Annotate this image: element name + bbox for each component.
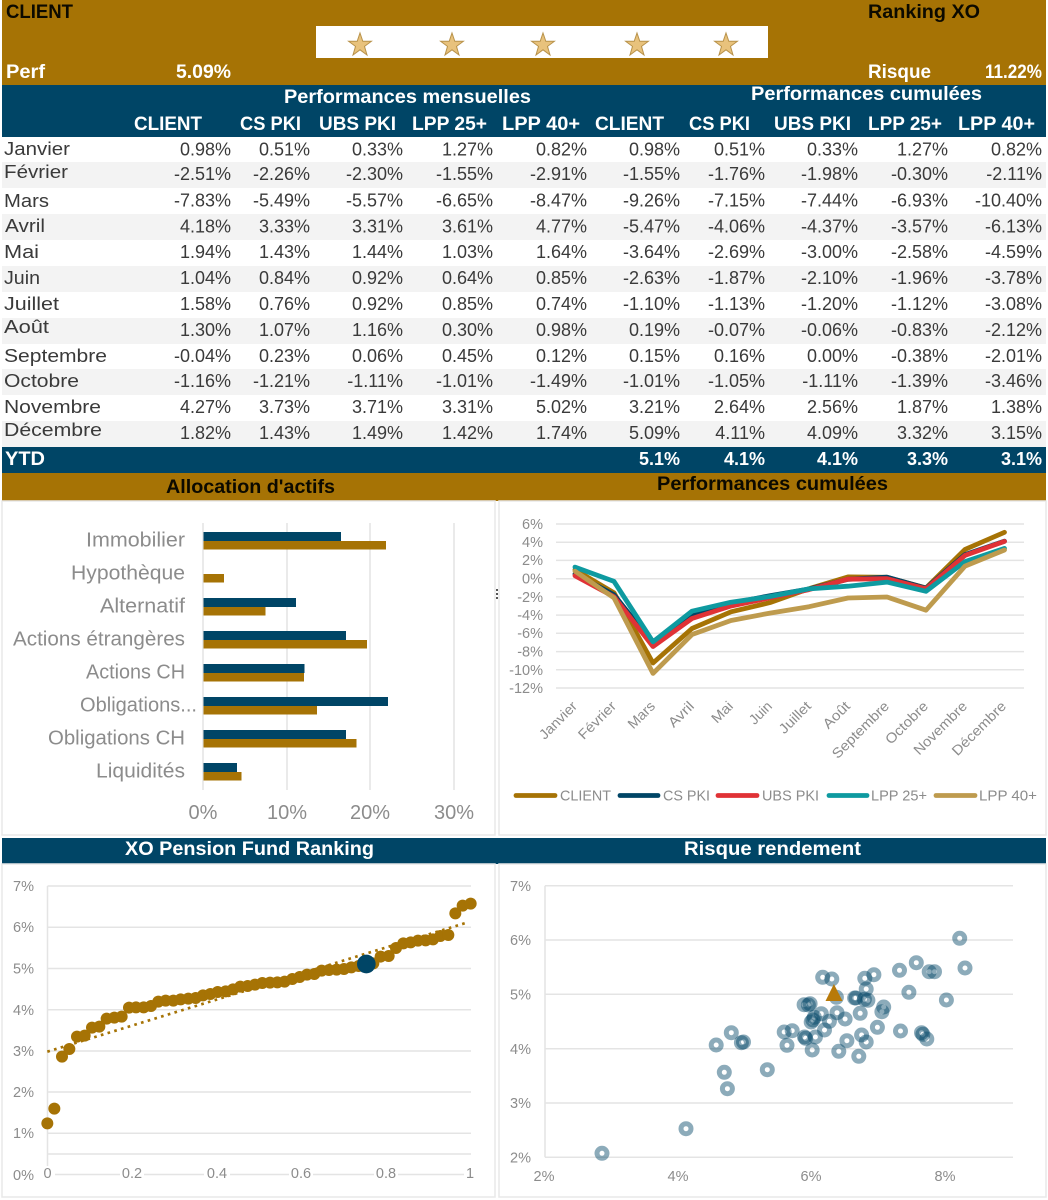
header band: CLIENT [6, 2, 73, 23]
panel: pension fund ranking chart: 6% [13, 920, 34, 936]
panel: cumulative performance line chart: Mai [708, 698, 736, 726]
panel: cumulative performance line chart: Juillet [775, 698, 814, 737]
table header: LPP 25+ [412, 114, 487, 135]
row: Juin: 0.84% [259, 268, 310, 288]
ranking stars [316, 26, 768, 58]
row: Janvier: 0.51% [714, 140, 765, 160]
row: Janvier: 0.51% [259, 140, 310, 160]
row: Mars [4, 190, 1042, 211]
row: Avril: 3.33% [259, 216, 310, 236]
row: Juin: -3.78% [985, 268, 1042, 288]
panel: asset allocation bar chart: 0% [189, 802, 218, 824]
section headings gold band: Performances cumulées [657, 474, 888, 495]
table header: CS PKI [689, 114, 750, 135]
table header: CLIENT [595, 114, 664, 135]
row: Mars: -8.47% [530, 190, 587, 210]
table header [2, 84, 1046, 137]
panel: risk return scatter chart: 5% [510, 988, 531, 1004]
row: Mars: -7.83% [174, 190, 231, 210]
row: Décembre: 3.32% [897, 423, 948, 443]
panel: cumulative performance line chart: Décembre [948, 698, 1009, 759]
row: Avril: 3.61% [442, 216, 493, 236]
row: Mars: -7.44% [801, 190, 858, 210]
row: Septembre: 0.45% [442, 346, 493, 366]
panel: pension fund ranking chart: 0 [43, 1166, 52, 1182]
table header: LPP 40+ [958, 114, 1035, 135]
row: Décembre: Décembre [4, 419, 102, 440]
row: Avril: -6.13% [985, 216, 1042, 236]
row: Janvier: 0.33% [352, 140, 403, 160]
panel: pension fund ranking chart: 3% [13, 1044, 34, 1060]
row: Mars: -6.65% [436, 190, 493, 210]
panel: cumulative performance line chart: -12% [509, 681, 543, 697]
row: Avril: 3.31% [352, 216, 403, 236]
row: Juillet: -1.12% [891, 294, 948, 314]
panel: cumulative performance line chart: 6% [522, 517, 543, 533]
panel: risk return scatter chart: 7% [510, 879, 531, 895]
row: Octobre: -1.01% [436, 371, 493, 391]
section headings blue band [2, 838, 1046, 864]
panel: cumulative performance line chart [499, 501, 1046, 835]
row: Octobre: -1.49% [530, 371, 587, 391]
row: Juin: -1.87% [708, 268, 765, 288]
panel: cumulative performance line chart: 0% [522, 572, 543, 588]
panel: asset allocation bar chart: Immobilier [86, 530, 185, 552]
row: Août: 0.30% [442, 320, 493, 340]
row: Février: -1.55% [623, 164, 680, 184]
row: Juin: 1.04% [180, 268, 231, 288]
section headings blue band: XO Pension Fund Ranking [125, 839, 374, 860]
row: Septembre: 0.12% [536, 346, 587, 366]
row: Mars: -9.26% [623, 190, 680, 210]
row: Février: -2.51% [174, 164, 231, 184]
header band: Perf [6, 62, 46, 83]
row: Février: Février [4, 161, 68, 182]
panel: risk return scatter chart: 6% [510, 933, 531, 949]
row: Août: 1.30% [180, 320, 231, 340]
row: Septembre: 0.16% [714, 346, 765, 366]
row: Janvier: Janvier [4, 138, 70, 159]
row: Juin: -1.96% [891, 268, 948, 288]
row: Avril [5, 215, 1042, 236]
row: Mai: 1.94% [180, 242, 231, 262]
panel: asset allocation bar chart: 20% [350, 802, 390, 824]
row: Juin: Juin [4, 267, 40, 288]
panel: cumulative performance line chart: -8% [517, 644, 543, 660]
panel: cumulative performance line chart: -10% [509, 663, 543, 679]
row: Novembre: Novembre [4, 396, 101, 417]
row: Octobre: -1.11% [347, 371, 403, 391]
panel: risk return scatter chart: 4% [510, 1042, 531, 1058]
header band: Risque [868, 62, 931, 83]
row: Juin [4, 267, 1042, 288]
row: Octobre: Octobre [4, 370, 79, 391]
panel: asset allocation bar chart [2, 501, 495, 835]
panel: cumulative performance line chart: 4% [522, 535, 543, 551]
row: Juillet: 0.74% [536, 294, 587, 314]
row: Mars: -5.49% [253, 190, 310, 210]
panel: risk return scatter chart: 8% [935, 1169, 956, 1185]
row: Septembre: 0.23% [259, 346, 310, 366]
panel: risk return scatter chart: 2% [534, 1169, 555, 1185]
row: Septembre: -2.01% [985, 346, 1042, 366]
panel: pension fund ranking chart: 5% [13, 962, 34, 978]
YTD row: YTD [5, 449, 45, 470]
section headings gold band [2, 473, 1046, 501]
row: Juillet: Juillet [4, 293, 59, 314]
row: Décembre: 4.11% [715, 423, 765, 443]
row: Décembre: 1.74% [536, 423, 587, 443]
row: Mai: 1.43% [259, 242, 310, 262]
row: Décembre: 1.82% [180, 423, 231, 443]
row: Novembre: 3.31% [442, 397, 493, 417]
panel: pension fund ranking chart: 4% [13, 1003, 34, 1019]
panel: cumulative performance line chart: -6% [517, 626, 543, 642]
table stripes [2, 162, 1046, 447]
row: Mai: 1.64% [536, 242, 587, 262]
row: Mars: -7.15% [708, 190, 765, 210]
row: Août: -0.06% [801, 320, 858, 340]
table header: UBS PKI [774, 114, 851, 135]
row: Juillet: -1.10% [623, 294, 680, 314]
panel: pension fund ranking chart: 0% [13, 1168, 34, 1184]
row: Décembre: 3.15% [991, 423, 1042, 443]
table header: LPP 40+ [502, 114, 580, 135]
row: Février [4, 161, 1042, 184]
row: Novembre: 3.73% [259, 397, 310, 417]
row: Février: -1.55% [436, 164, 493, 184]
row: Décembre: 1.49% [352, 423, 403, 443]
YTD row: 5.1% [639, 449, 680, 469]
row: Juin: 0.92% [352, 268, 403, 288]
row: Juillet: -3.08% [985, 294, 1042, 314]
row: Octobre [4, 370, 1042, 391]
row: Septembre: 0.00% [807, 346, 858, 366]
row: Mars: -6.93% [891, 190, 948, 210]
row: Novembre [4, 396, 1042, 417]
row: Octobre: -1.05% [708, 371, 765, 391]
row: Février: -2.26% [253, 164, 310, 184]
row: Juillet: 0.92% [352, 294, 403, 314]
row: Novembre: 3.21% [629, 397, 680, 417]
legend: LPP 25+ [871, 788, 927, 804]
row: Janvier: 1.27% [442, 140, 493, 160]
row: Mai: -4.59% [985, 242, 1042, 262]
panel: pension fund ranking chart: 0.2 [122, 1166, 142, 1182]
row: Mai: -3.64% [623, 242, 680, 262]
panel: cumulative performance line chart: -2% [517, 590, 543, 606]
table header: LPP 25+ [868, 114, 942, 135]
row: Avril: -5.47% [623, 216, 680, 236]
row: Janvier: 0.33% [807, 140, 858, 160]
row: Janvier: 1.27% [897, 140, 948, 160]
row: Novembre: 1.87% [897, 397, 948, 417]
row: Juin: 0.64% [442, 268, 493, 288]
table header: UBS PKI [319, 114, 396, 135]
row: Septembre: Septembre [4, 345, 107, 366]
YTD row: 4.1% [817, 449, 858, 469]
row: Juillet: 0.85% [442, 294, 493, 314]
row: Mai [4, 241, 1042, 262]
row: Décembre: 1.43% [259, 423, 310, 443]
panel: cumulative performance line chart: Octobre [882, 698, 931, 747]
row: Février: -2.30% [346, 164, 403, 184]
row: Novembre: 2.56% [807, 397, 858, 417]
header band: 5.09% [176, 62, 231, 83]
header band [2, 0, 1046, 85]
row: Mai: 1.03% [442, 242, 493, 262]
panel: pension fund ranking chart: 0.6 [291, 1166, 311, 1182]
row: Juillet [4, 293, 1042, 314]
YTD row: 3.1% [1001, 449, 1042, 469]
row: Février: -0.30% [891, 164, 948, 184]
panel: asset allocation bar chart: Hypothèque [71, 562, 185, 584]
row: Octobre: -3.46% [985, 371, 1042, 391]
panel: asset allocation bar chart: Liquidités [96, 760, 185, 782]
header band: 11.22% [985, 62, 1042, 83]
panel: risk return scatter chart [499, 864, 1046, 1197]
row: Janvier: 0.98% [629, 140, 680, 160]
YTD row: 3.3% [907, 449, 948, 469]
row: Août: -2.12% [985, 320, 1042, 340]
row: Mai: Mai [4, 241, 39, 262]
row: Août: 1.16% [352, 320, 403, 340]
row: Avril: -4.37% [801, 216, 858, 236]
row: Août [4, 316, 1042, 340]
row: Juin: -2.63% [623, 268, 680, 288]
row: Novembre: 1.38% [991, 397, 1042, 417]
panel: asset allocation bar chart: Obligations CH [48, 728, 185, 750]
row: Décembre: 5.09% [629, 423, 680, 443]
panel: cumulative performance line chart: Août [819, 698, 853, 732]
panel: pension fund ranking chart: 2% [13, 1085, 34, 1101]
row: Mai: -2.69% [708, 242, 765, 262]
row: Mai: 1.44% [352, 242, 403, 262]
panel: cumulative performance line chart: 2% [522, 553, 543, 569]
row: Mars: -5.57% [346, 190, 403, 210]
legend: UBS PKI [762, 788, 819, 804]
panel: asset allocation bar chart: Actions étrangères [13, 628, 185, 650]
row: Août: -0.83% [891, 320, 948, 340]
legend: CLIENT [560, 788, 611, 804]
row: Avril: -4.06% [708, 216, 765, 236]
row: Mai: -3.00% [801, 242, 858, 262]
panel: cumulative performance line chart: Avril [665, 698, 697, 730]
row: Avril: Avril [5, 215, 45, 236]
table header: CS PKI [240, 114, 301, 135]
row: Septembre: -0.04% [174, 346, 231, 366]
row: Décembre: 1.42% [442, 423, 493, 443]
legend [516, 788, 1037, 804]
panel: cumulative performance line chart: Mars [624, 698, 658, 732]
row: Novembre: 3.71% [352, 397, 403, 417]
table header: CLIENT [134, 114, 202, 135]
row: Janvier: 0.82% [536, 140, 587, 160]
panel: pension fund ranking chart: 0.4 [207, 1166, 227, 1182]
panel: pension fund ranking chart: 1% [13, 1126, 34, 1142]
panel: cumulative performance line chart: Novembre [910, 698, 970, 758]
row: Août: 0.19% [629, 320, 680, 340]
section headings gold band: Allocation d'actifs [166, 477, 335, 498]
panel: pension fund ranking chart: 0.8 [376, 1166, 396, 1182]
row: Janvier [4, 138, 1042, 160]
YTD row [2, 447, 1046, 473]
panel: cumulative performance line chart: Janvier [536, 698, 580, 742]
row: Mai: -2.58% [891, 242, 948, 262]
panel: pension fund ranking chart: 1 [466, 1166, 474, 1182]
row: Octobre: -1.01% [623, 371, 680, 391]
row: Décembre: 4.09% [807, 423, 858, 443]
row: Juillet: 0.76% [259, 294, 310, 314]
row: Octobre: -1.21% [253, 371, 310, 391]
row: Mars: Mars [4, 190, 49, 211]
row: Juillet: 1.58% [180, 294, 231, 314]
row: Janvier: 0.98% [180, 140, 231, 160]
row: Octobre: -1.11% [802, 371, 858, 391]
row: Septembre: 0.06% [352, 346, 403, 366]
legend: LPP 40+ [979, 788, 1037, 804]
row: Août: 1.07% [259, 320, 310, 340]
row: Juillet: -1.13% [708, 294, 765, 314]
row: Octobre: -1.16% [174, 371, 231, 391]
row: Juillet: -1.20% [801, 294, 858, 314]
row: Février: -1.76% [708, 164, 765, 184]
row: Août: 0.98% [536, 320, 587, 340]
row: Novembre: 4.27% [180, 397, 231, 417]
row: Septembre: 0.15% [629, 346, 680, 366]
row: Novembre: 2.64% [714, 397, 765, 417]
row: Juin: 0.85% [536, 268, 587, 288]
row: Septembre: -0.38% [891, 346, 948, 366]
section headings blue band: Risque rendement [684, 839, 862, 860]
panel: pension fund ranking chart [2, 864, 495, 1197]
row: Mars: -10.40% [975, 190, 1042, 210]
YTD row: 4.1% [724, 449, 765, 469]
panel: asset allocation bar chart: 10% [267, 802, 307, 824]
panel: risk return scatter chart: 6% [801, 1169, 822, 1185]
row: Septembre [4, 345, 1042, 366]
panel: cumulative performance line chart: Juin [745, 698, 775, 728]
panel: asset allocation bar chart: 30% [434, 802, 474, 824]
panel: risk return scatter chart: 4% [668, 1169, 689, 1185]
panel: cumulative performance line chart: -4% [517, 608, 543, 624]
row: Juin: -2.10% [801, 268, 858, 288]
row: Avril: 4.18% [180, 216, 231, 236]
row: Février: -2.91% [530, 164, 587, 184]
panel: asset allocation bar chart: Alternatif [100, 596, 185, 618]
row: Février: -2.11% [986, 164, 1042, 184]
row: Août: -0.07% [708, 320, 765, 340]
row: Avril: 4.77% [536, 216, 587, 236]
panel: asset allocation bar chart: Obligations... [80, 694, 197, 716]
row: Décembre [4, 419, 1042, 443]
row: Novembre: 5.02% [536, 397, 587, 417]
legend: CS PKI [663, 788, 710, 804]
row: Janvier: 0.82% [991, 140, 1042, 160]
panel: cumulative performance line chart: Février [575, 698, 619, 742]
row: Avril: -3.57% [891, 216, 948, 236]
table header: Performances cumulées [751, 84, 982, 105]
panel: cumulative performance line chart: Septembre [828, 698, 892, 761]
row: Février: -1.98% [801, 164, 858, 184]
panel: risk return scatter chart: 3% [510, 1096, 531, 1112]
panel: asset allocation bar chart: Actions CH [86, 662, 185, 684]
header band: Ranking XO [868, 2, 980, 23]
row: Août: Août [4, 316, 49, 337]
row: Octobre: -1.39% [891, 371, 948, 391]
panel: pension fund ranking chart: 7% [13, 879, 34, 895]
panel: risk return scatter chart: 2% [510, 1150, 531, 1166]
table header: Performances mensuelles [284, 87, 531, 108]
